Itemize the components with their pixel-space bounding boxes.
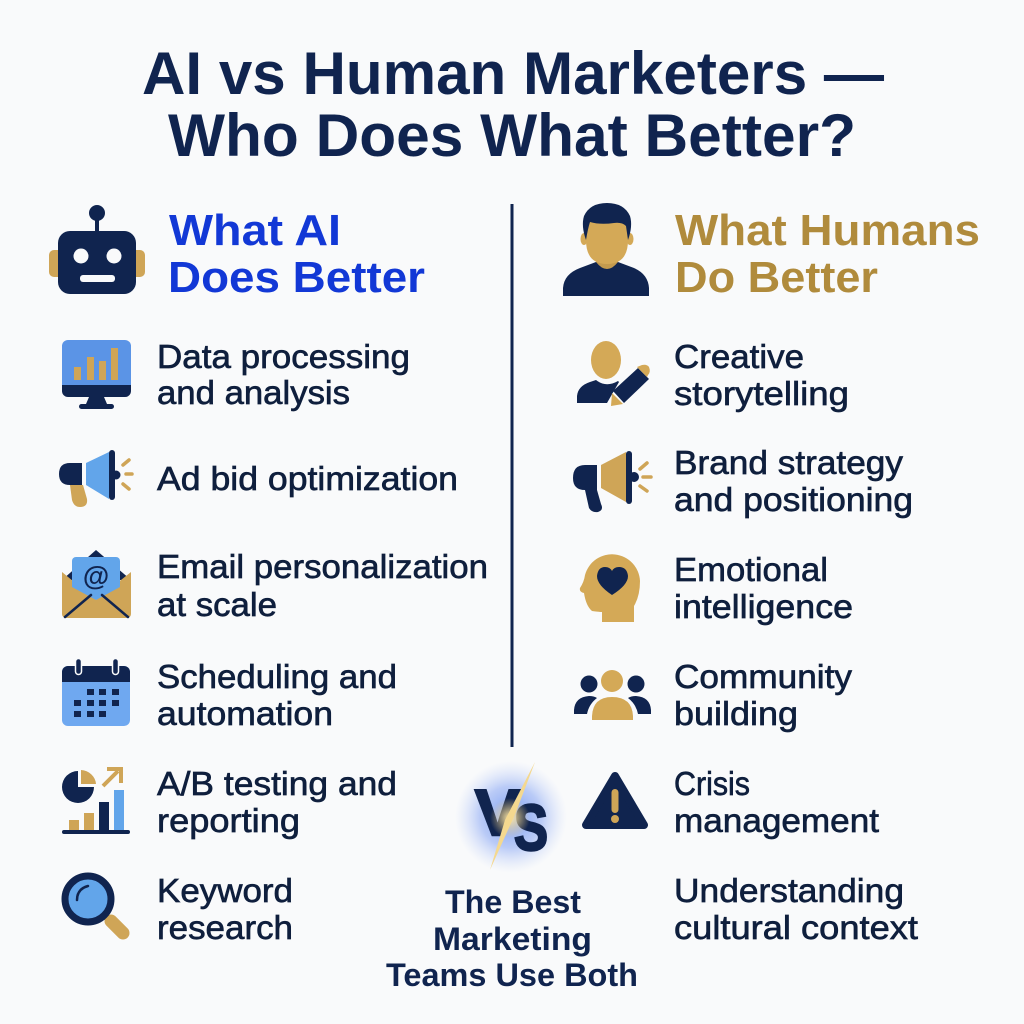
item: emotional intelligence: [580, 551, 853, 625]
heading: What Humans Do Better: [675, 206, 980, 302]
text: Scheduling and: [157, 658, 397, 695]
item: creative storytelling: [577, 338, 849, 412]
item: crisis management: [586, 765, 879, 839]
text: Brand strategy: [674, 444, 904, 481]
icon: megaphone: [573, 451, 651, 512]
item: community building: [574, 658, 853, 732]
text: [157, 872, 293, 946]
icon: calendar: [62, 658, 130, 726]
icon: warning triangle: [586, 776, 644, 825]
heading: What AI Does Better: [168, 206, 425, 302]
VS badge: S: [514, 791, 548, 864]
text: [674, 765, 879, 839]
item: A/B testing: [62, 765, 397, 839]
text: [674, 444, 913, 518]
title: [142, 40, 884, 169]
icon: robot: [49, 205, 145, 294]
item: brand strategy: [573, 444, 913, 518]
title: AI vs Human Marketers —: [142, 40, 884, 107]
text: Email personalization: [157, 548, 488, 585]
text: at scale: [157, 586, 277, 623]
tagline: Teams Use Both: [386, 957, 638, 993]
icon: three people: [574, 670, 651, 720]
text: reporting: [157, 802, 300, 839]
item: ad bid optimization: [59, 450, 458, 507]
text: Crisis: [674, 765, 750, 802]
text: Ad bid optimization: [157, 460, 458, 497]
text: management: [674, 802, 879, 839]
VS badge: [455, 761, 567, 873]
heading: What AI Does Better: What AI: [169, 206, 341, 255]
text: Data processing: [157, 338, 410, 375]
text: automation: [157, 695, 333, 732]
icon: monitor chart: [62, 340, 131, 409]
text: and positioning: [674, 481, 913, 518]
VS badge: V: [475, 776, 520, 849]
icon: envelope: @: [83, 561, 109, 591]
tagline: [386, 884, 638, 993]
text: [674, 338, 849, 412]
item: data processing: [62, 338, 410, 411]
text: and analysis: [157, 374, 350, 411]
text: Creative: [674, 338, 804, 375]
tagline: Marketing: [433, 921, 592, 957]
text: [674, 658, 853, 732]
heading: What AI Does Better: Does Better: [168, 253, 425, 302]
item: understanding cultural context: [674, 872, 918, 946]
title: Who Does What Better?: [168, 102, 856, 169]
icon: person with pencil: [577, 341, 650, 406]
text: [674, 551, 853, 625]
text: intelligence: [674, 588, 853, 625]
item: scheduling: [62, 658, 397, 732]
panel: what AI does better: [49, 205, 488, 946]
text: [157, 338, 410, 411]
icon: megaphone: [59, 450, 132, 507]
tagline: The Best: [445, 884, 581, 920]
heading: What Humans Do Better: Do Better: [675, 253, 878, 302]
icon: magnifier: [65, 876, 123, 933]
item: understanding cultural context: Understanding: [674, 872, 904, 909]
text: Community: [674, 658, 853, 695]
icon: head with heart: [580, 554, 640, 622]
icon: person: [563, 203, 649, 296]
icon: envelope: [62, 550, 131, 618]
text: building: [674, 695, 798, 732]
heading: What Humans Do Better: What Humans: [675, 206, 980, 255]
text: Keyword: [157, 872, 293, 909]
item: email personalization: [62, 548, 488, 623]
text: storytelling: [674, 375, 849, 412]
text: Emotional: [674, 551, 828, 588]
text: [157, 765, 397, 839]
item: keyword research: [65, 872, 293, 946]
text: research: [157, 909, 293, 946]
text: A/B testing and: [157, 765, 397, 802]
text: [157, 548, 488, 623]
text: [157, 658, 397, 732]
icon: chart with pie and arrow: [62, 769, 130, 834]
panel: what humans do better: [563, 203, 980, 946]
item: understanding cultural context: cultural context: [674, 909, 918, 946]
